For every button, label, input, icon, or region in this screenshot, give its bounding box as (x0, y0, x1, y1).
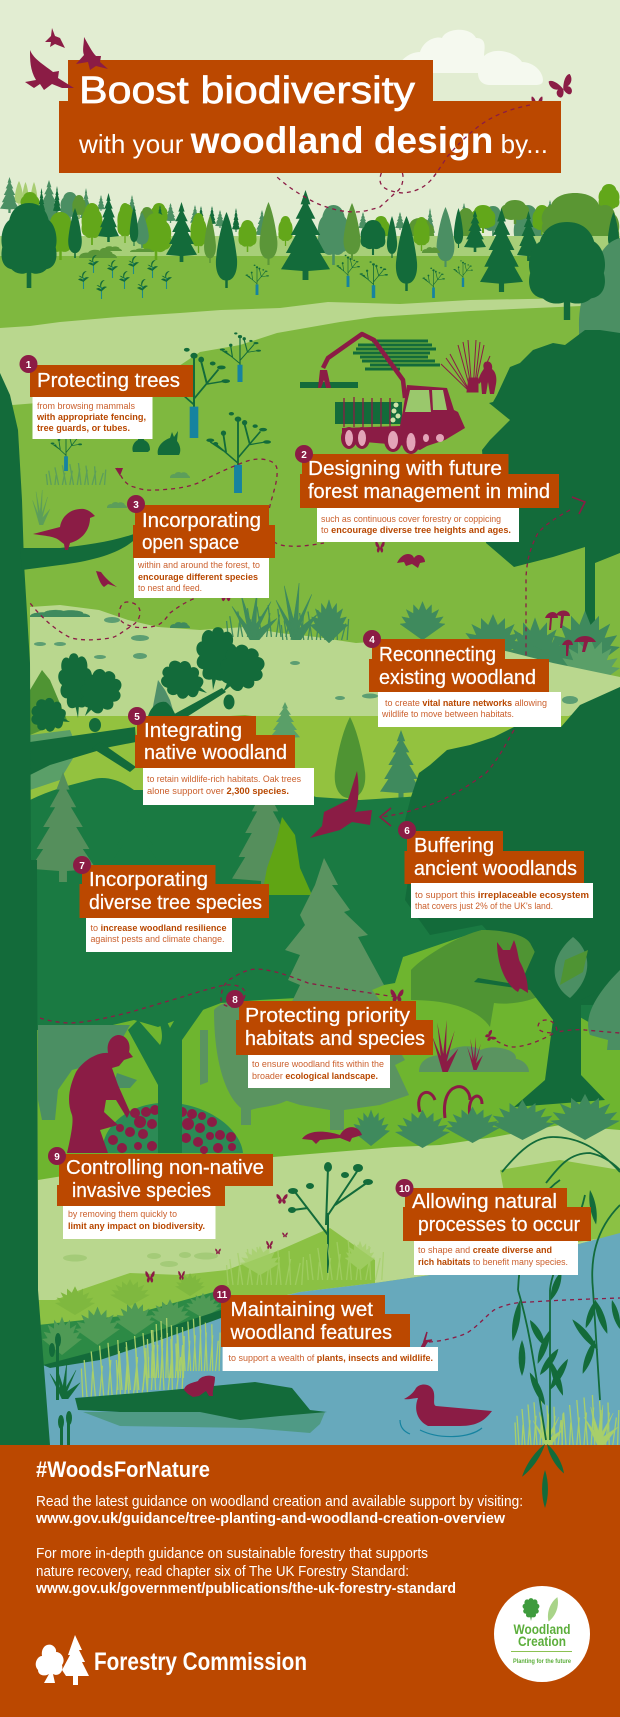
teal bush with red flowering plants (419, 1020, 529, 1072)
step 5: 5 (134, 712, 140, 723)
lower right tree trunk foot (542, 723, 566, 753)
guidance paragraph 2: For more in-depth guidance on sustainable forestry that supports (36, 1545, 428, 1562)
step 8: habitats and species (245, 1028, 425, 1050)
step 5: alone support over 2,300 species. (147, 786, 289, 796)
icon: rabbits (132, 431, 180, 455)
step 8: to ensure woodland fits within the (252, 1059, 384, 1069)
step 1 (20, 355, 193, 439)
step 3 (127, 495, 275, 598)
step 7: against pests and climate change. (90, 934, 224, 944)
green bank left of water (38, 1228, 375, 1370)
step 4: existing woodland (379, 667, 536, 689)
step 8: Protecting priority (245, 1005, 410, 1027)
harvester log stack (300, 341, 440, 385)
reed clump (441, 340, 490, 392)
right dark tree and trunk (474, 937, 620, 1107)
lighter meadow strip (0, 236, 620, 260)
step 3: within and around the forest, to (137, 560, 260, 570)
guidance paragraph 1: www.gov.uk/guidance/tree-planting-and-woodland-creation-overview (35, 1510, 505, 1527)
big flying bird near buffer (310, 771, 372, 838)
step 5: Integrating (144, 720, 242, 742)
mushrooms (302, 1127, 362, 1144)
icon: gardener and rhododendron (67, 1035, 243, 1154)
Woodland Creation logo: Woodland (514, 1621, 570, 1637)
bright green bluebell plants (30, 583, 445, 643)
step 7 (73, 856, 269, 952)
bright woodland floor (38, 930, 620, 1240)
ride scatter patches (34, 617, 578, 704)
step 7: to increase woodland resilience (90, 923, 226, 933)
step 4: 4 (369, 635, 375, 646)
step 4: to create vital nature networks allowing (385, 698, 547, 708)
floating log and reflection (75, 1382, 327, 1433)
step 10: processes to occur (418, 1214, 580, 1236)
step 1: Protecting trees (37, 370, 180, 392)
icon: forest harvester (318, 334, 465, 454)
hashtag: #WoodsForNature (36, 1457, 210, 1482)
base ground layer for the lower scene (0, 1016, 620, 1445)
step 3: Incorporating (142, 510, 261, 532)
step 3: open space (142, 532, 239, 554)
Woodland Creation logo: Planting for the future (513, 1659, 572, 1665)
step 6: ancient woodlands (414, 858, 577, 880)
step 11: 11 (217, 1290, 228, 1301)
footer band (0, 1445, 620, 1717)
guidance paragraph 2: www.gov.uk/government/publications/the-uk-forestry-standard (35, 1580, 456, 1597)
foreground treeline (46, 190, 619, 292)
step 2: forest management in mind (308, 481, 550, 503)
guidance paragraph 2 (35, 1545, 456, 1597)
oak branch and leaves (0, 625, 273, 780)
tree guards section: protected young trees (51, 332, 271, 493)
step 6: to support this irreplaceable ecosystem (415, 890, 589, 900)
willow tip overlapping footer (520, 1442, 567, 1508)
step 4: wildlife to move between habitats. (381, 709, 514, 719)
dark sapling on lower floor (288, 1162, 373, 1273)
step 11 (213, 1285, 438, 1371)
step 8 (226, 990, 433, 1088)
step 10 (396, 1179, 591, 1275)
butterflies and insects (220, 74, 577, 1043)
step 9: limit any impact on biodiversity. (68, 1221, 205, 1231)
right plants and mushrooms (463, 611, 620, 690)
right tree canopy, upper (482, 330, 620, 625)
step 9: by removing them quickly to (68, 1209, 177, 1219)
step 2: 2 (301, 450, 307, 461)
sky background (0, 0, 620, 300)
step 4: Reconnecting (379, 644, 496, 666)
step 9 (48, 1147, 273, 1239)
water (40, 1233, 620, 1445)
willow branches and leaves (502, 1137, 620, 1440)
branch with robin perch (20, 531, 142, 570)
step 7: diverse tree species (89, 892, 262, 914)
lower floor wildflower plants (227, 1240, 383, 1285)
teal spruce tree (269, 858, 409, 1130)
large tree on the left (1, 203, 57, 288)
step 3: to nest and feed. (138, 583, 202, 593)
step 6: that covers just 2% of the UK's land. (415, 901, 553, 911)
step 11: woodland features (230, 1322, 392, 1344)
floor patches (63, 1252, 218, 1267)
background tree line (0, 177, 619, 265)
step 10: 10 (399, 1184, 410, 1195)
shrubs in the meadow (79, 246, 440, 258)
icon: moth start (115, 468, 123, 476)
step 9: Controlling non-native (66, 1157, 264, 1179)
step 3: encourage different species (138, 572, 258, 582)
icon: small bird (96, 571, 117, 587)
arrowheads (380, 497, 585, 826)
lower woodland ride (30, 605, 620, 737)
icon: duck (400, 1384, 492, 1437)
step 2: such as continuous cover forestry or coppicing (321, 514, 501, 524)
olive and teal trees mid scene (30, 670, 422, 807)
step 2: Designing with future (308, 458, 502, 480)
left tree trunk (0, 373, 50, 1445)
right reeds (515, 1395, 619, 1445)
step 5 (128, 707, 314, 805)
step 1: from browsing mammals (37, 401, 135, 411)
Forestry Commission logo (36, 1635, 307, 1685)
step 10: to shape and create diverse and (418, 1245, 552, 1255)
Forestry Commission logo: Forestry Commission (94, 1648, 307, 1676)
large tree on the right with trunk (529, 222, 620, 360)
guidance paragraph 1 (35, 1493, 523, 1527)
green bank by the water (500, 1160, 620, 1245)
lower right canopy (405, 687, 620, 1005)
step 11: Maintaining wet (230, 1299, 373, 1321)
step 10: Allowing natural (412, 1191, 557, 1213)
back teal tree on the left (38, 1025, 130, 1120)
grass and bushes near rabbits (33, 463, 190, 525)
step 8: 8 (232, 995, 238, 1006)
step 8: broader ecological landscape. (252, 1071, 378, 1081)
young planted saplings (78, 255, 172, 299)
step 5: to retain wildlife-rich habitats. Oak trees (147, 774, 301, 784)
step 11: to support a wealth of plants, insects and wildlife. (228, 1353, 433, 1363)
mid canopy mass (30, 778, 620, 1030)
step 4 (363, 630, 561, 727)
icon: forester (478, 361, 496, 394)
step 1: 1 (26, 360, 32, 371)
bright floor under the oak branch (30, 716, 620, 806)
dashed flight paths (30, 105, 620, 1342)
step 9: invasive species (72, 1180, 211, 1202)
step 2: to encourage diverse tree heights and ages. (321, 525, 511, 535)
step 1: with appropriate fencing, (36, 412, 146, 422)
title line 2: with your woodland design by... (78, 120, 548, 161)
step 5: native woodland (144, 742, 287, 764)
centre tree trunk (128, 1000, 210, 1150)
icon: dragonfly (420, 1332, 432, 1350)
icon: frog (184, 1376, 215, 1397)
step 3: 3 (133, 500, 139, 511)
step 6: Buffering (414, 835, 494, 857)
title dashed path over banner (431, 105, 530, 180)
icon: robin (33, 509, 95, 550)
olive tree right (411, 930, 546, 1027)
flock of birds (25, 28, 108, 90)
teal broad tree (200, 1002, 300, 1125)
icon: owl (497, 940, 528, 993)
step 1: tree guards, or tubes. (37, 423, 130, 433)
Woodland Creation logo: Creation (518, 1633, 566, 1649)
teal understorey trees (30, 772, 312, 895)
main grass field (0, 256, 620, 1016)
guidance paragraph 1: Read the latest guidance on woodland creation and available support by visiting: (36, 1493, 523, 1510)
step 7: Incorporating (89, 869, 208, 891)
floor butterflies (145, 1194, 288, 1283)
upper woodland ride (0, 298, 581, 406)
step 6: 6 (404, 826, 410, 837)
step 7: 7 (79, 861, 85, 872)
step 6 (398, 821, 593, 918)
guidance paragraph 2: nature recovery, read chapter six of The UK Forestry Standard: (36, 1563, 409, 1580)
saplings in tree guards (245, 255, 473, 298)
cloud (395, 30, 543, 85)
Woodland Creation logo (494, 1586, 590, 1682)
step 2 (295, 445, 559, 542)
light woodland floor bottom (38, 1125, 620, 1300)
title banner (59, 60, 561, 173)
maroon ferns (419, 1087, 482, 1118)
left bank plants (38, 1273, 221, 1445)
title line 1: Boost biodiversity (79, 70, 415, 112)
teal leaf by gardener (112, 1073, 137, 1088)
step 10: rich habitats to benefit many species. (418, 1257, 568, 1267)
teal ground ferns (352, 1094, 620, 1148)
step 9: 9 (54, 1152, 60, 1163)
